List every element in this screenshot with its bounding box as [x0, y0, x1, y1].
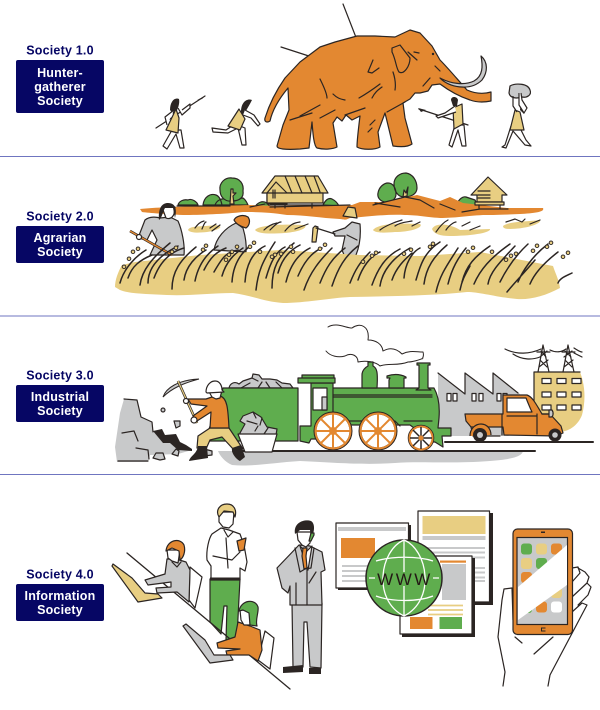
icon: apartment building: [534, 372, 584, 432]
background: wheat field: [115, 250, 560, 303]
label: Society 1.0: [16, 44, 104, 113]
icon: WWW globe: WWW: [377, 570, 433, 589]
label: Society 2.0: Society: [37, 245, 83, 259]
label: Society 2.0: Agrarian: [33, 231, 87, 245]
icon: desk line: [127, 553, 290, 689]
background: ground shadow: [218, 451, 523, 466]
icon: chair 1: [189, 567, 202, 608]
icon: WWW globe: [366, 540, 442, 616]
icon: hunter running: [212, 100, 260, 145]
icon: power pylons and wires: [505, 345, 582, 372]
icon: farmer with hoe: [312, 207, 360, 262]
label: Society 1.0: gatherer: [34, 80, 86, 94]
chart: wheat seeds: [122, 241, 570, 269]
icon: seated woman: [217, 601, 262, 661]
icon: miner with pickaxe: [163, 379, 245, 461]
icon: hunter lifting rock: [502, 84, 531, 148]
icon: locomotive: [233, 362, 593, 451]
icon: hunter with spear, right: [418, 97, 468, 147]
label: Society 4.0: Information: [25, 589, 95, 603]
label: Society 2.0: [16, 210, 104, 263]
illustration: hunters and mammoth: [156, 4, 531, 149]
illustration: information society: [112, 504, 591, 689]
label: Society 4.0: Society: [37, 603, 83, 617]
icon: web page 1: [336, 523, 411, 590]
icon: coal wagon: [205, 374, 298, 441]
icon: hunter with spear, left: [156, 96, 205, 149]
label: Society 3.0: Industrial: [31, 390, 89, 404]
icon: three-wheeled truck: [465, 395, 563, 442]
chart: wheat blades: [120, 242, 572, 292]
label: Society 3.0: Society: [37, 404, 83, 418]
label: Society 4.0: [16, 568, 104, 621]
icon: trees: [178, 173, 478, 207]
icon: mammoth: [265, 4, 491, 149]
icon: small hut: [462, 177, 508, 212]
label: Society 3.0: [16, 368, 104, 422]
icon: standing man with white shirt and green trousers: [207, 504, 247, 640]
label: Society 1.0: Society: [37, 94, 83, 108]
background: straw patches: [188, 220, 540, 236]
icon: bent-over farmer: [214, 216, 249, 252]
icon: seated man with gray shirt: [145, 540, 190, 602]
illustration: industry: [115, 325, 593, 466]
icon: man in suit on the phone: [277, 520, 325, 674]
label: Society 4.0: Society 4.0: [26, 568, 94, 582]
icon: factory: [438, 373, 520, 436]
label: Society 2.0: Society 2.0: [26, 210, 94, 224]
icon: laptop yellow: [112, 564, 162, 602]
label: Society 3.0: Society 3.0: [26, 368, 94, 382]
label: Society 1.0: Society 1.0: [26, 44, 94, 58]
icon: chair 2: [258, 631, 274, 669]
icon: smoke: [326, 325, 423, 366]
icon: web page 2: [418, 511, 493, 605]
icon: large farmhouse: [262, 176, 328, 208]
label: Society 1.0: Hunter-: [37, 66, 83, 80]
icon: ore cart: [238, 412, 277, 452]
icon: farmer with sickle: [130, 203, 184, 255]
background: orange hills: [140, 195, 543, 220]
icon: hand holding tablet: [498, 529, 591, 686]
icon: laptop gray: [183, 624, 233, 663]
icon: rock face: [115, 399, 212, 462]
illustration: farming field: [115, 173, 572, 303]
icon: web page 3: [400, 556, 475, 637]
